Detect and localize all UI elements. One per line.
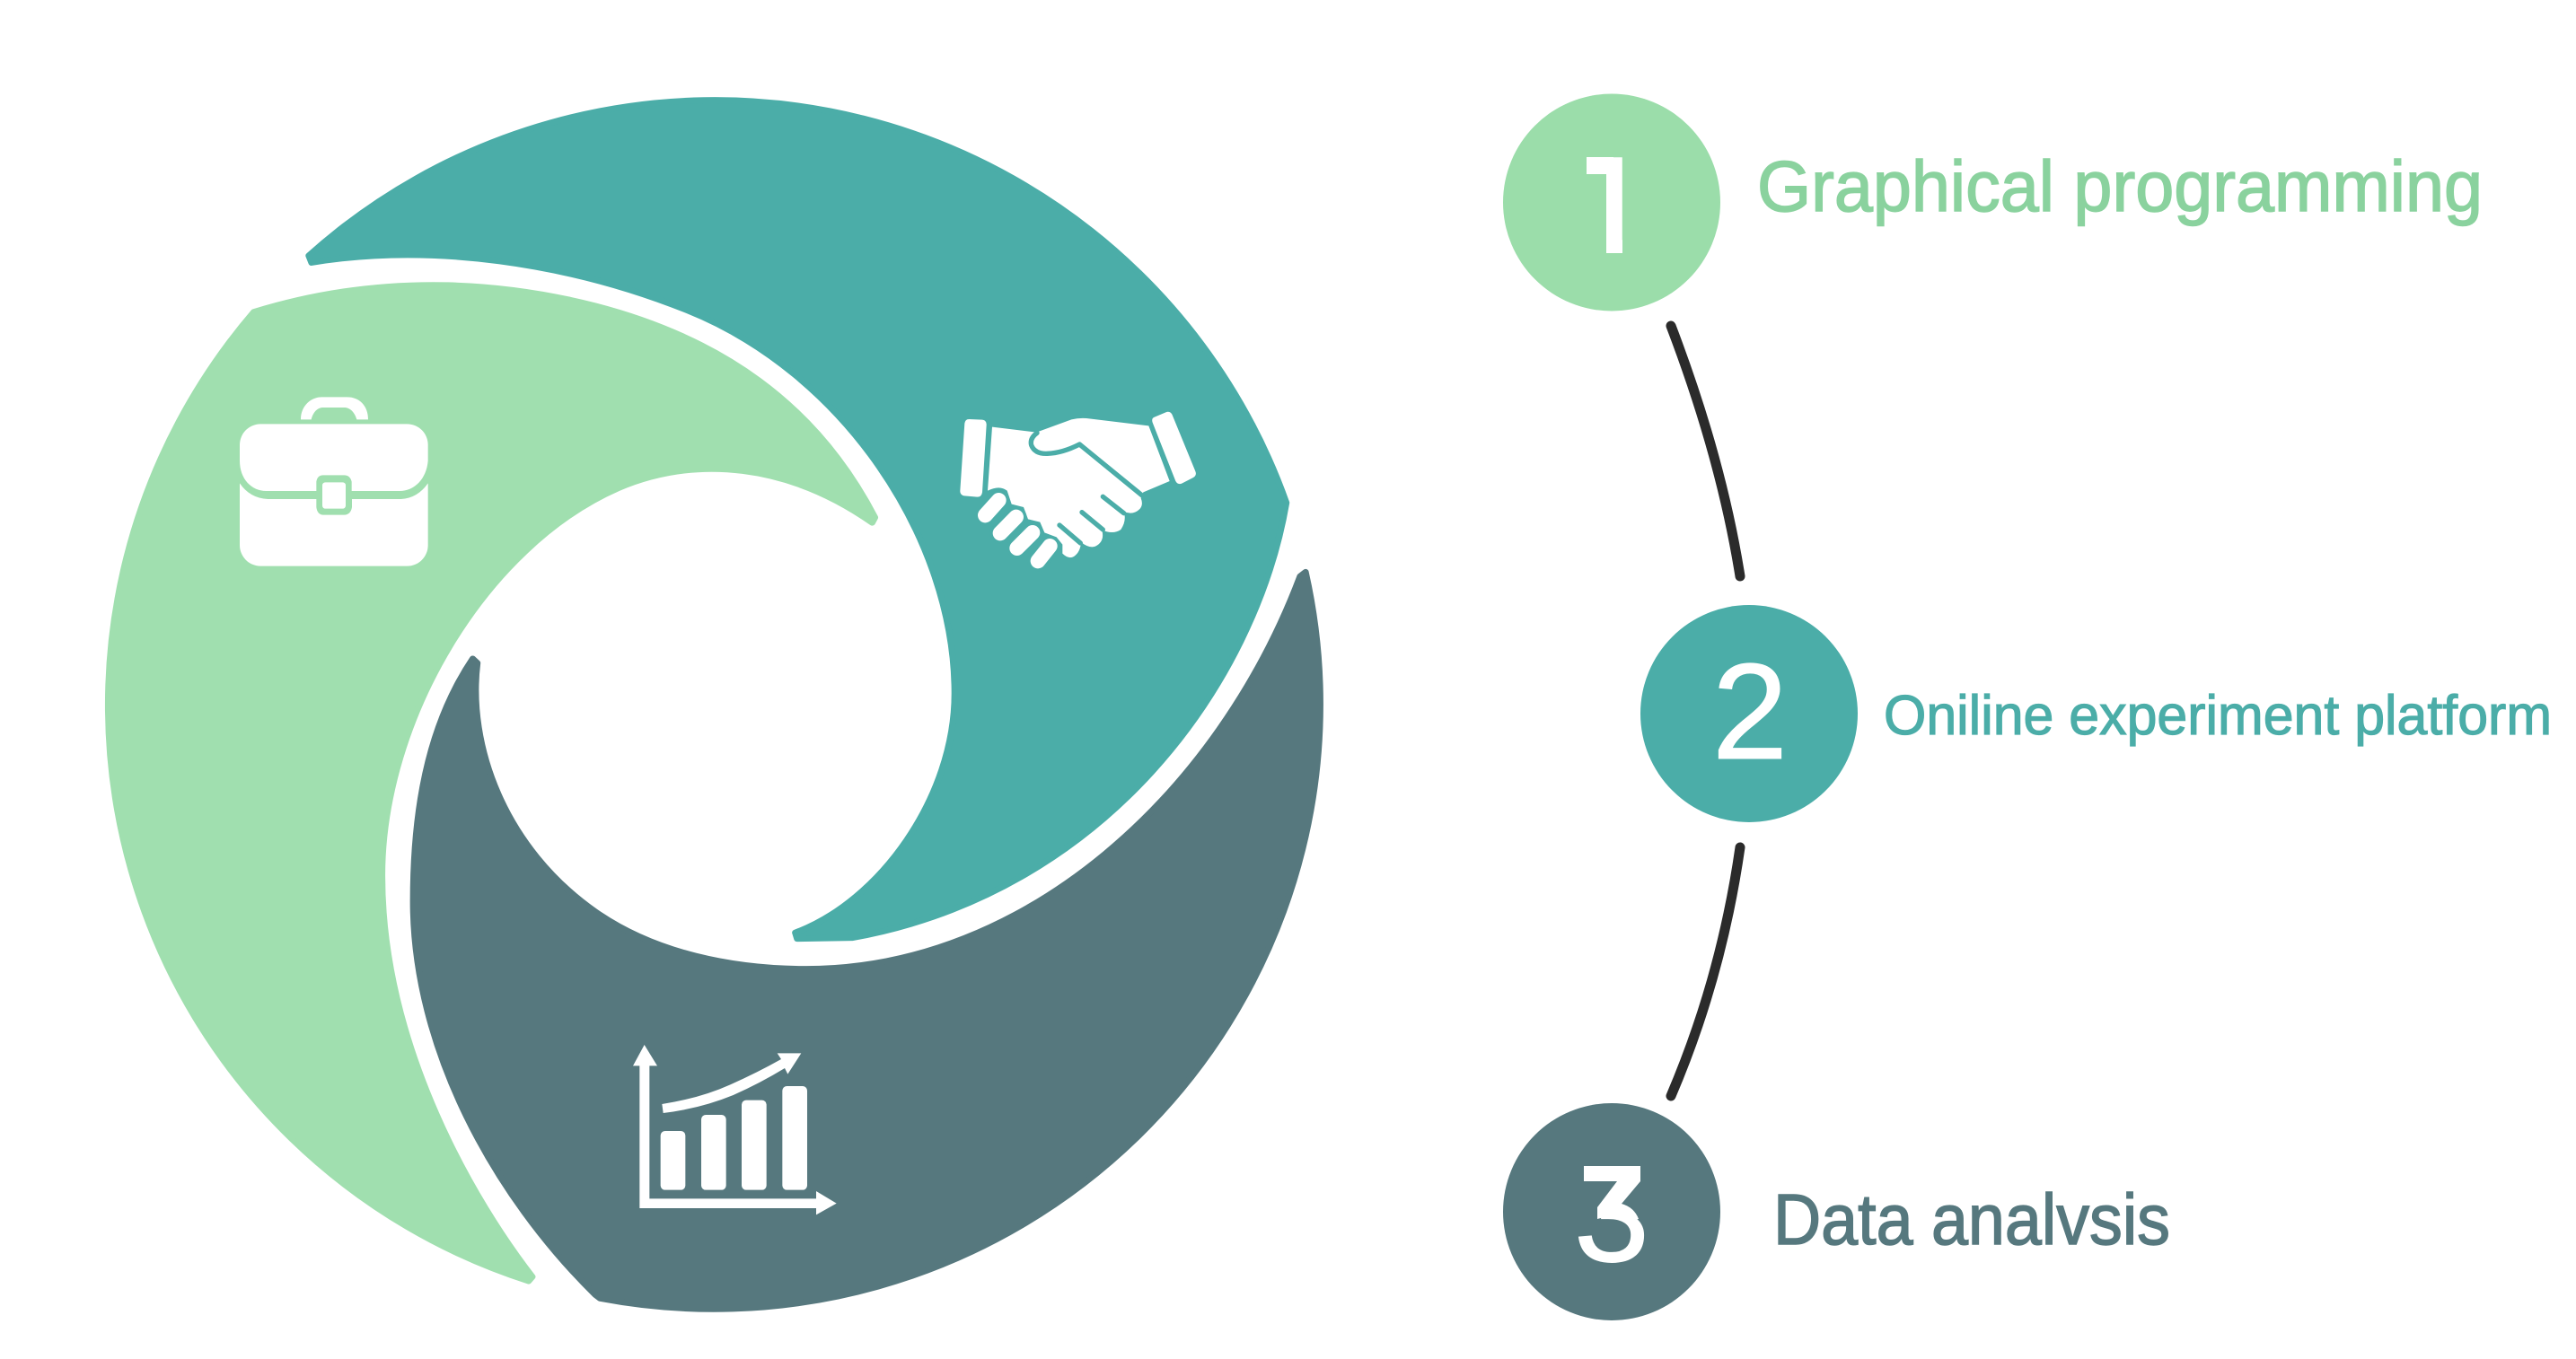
step 2: [1640, 605, 2552, 822]
step 1 label: Graphical programming: [1757, 146, 2483, 226]
segment: dark slate: [413, 572, 1320, 1309]
connector line: step 2 to 3: [1671, 847, 1740, 1096]
swirl segments: [109, 101, 1320, 1309]
panel: three-part circular swirl: [109, 101, 1320, 1309]
step 1 circle: [1503, 93, 1720, 311]
connector line: step 1 to 2: [1671, 326, 1740, 576]
icon: rising bar chart: [633, 1045, 837, 1214]
step 1 number: 1: [1574, 130, 1649, 281]
step 3 label: Data analvsis: [1773, 1179, 2170, 1259]
step 3 circle: [1503, 1103, 1720, 1320]
step 3: [1503, 1103, 2170, 1320]
step 3 number: [1578, 1166, 1645, 1263]
segment: light green: [109, 285, 875, 1281]
step 2 label: Oniline experiment platform: [1884, 685, 2552, 747]
step 1: [1503, 93, 2483, 311]
step 2 number: 2: [1712, 636, 1788, 788]
segment: teal: [309, 101, 1287, 939]
step 3 number: 3: [1574, 1138, 1649, 1291]
icon: handshake: [960, 412, 1196, 561]
step 2 circle: [1640, 605, 1858, 822]
step 1 number: [1587, 157, 1622, 253]
icon: briefcase: [240, 397, 428, 566]
